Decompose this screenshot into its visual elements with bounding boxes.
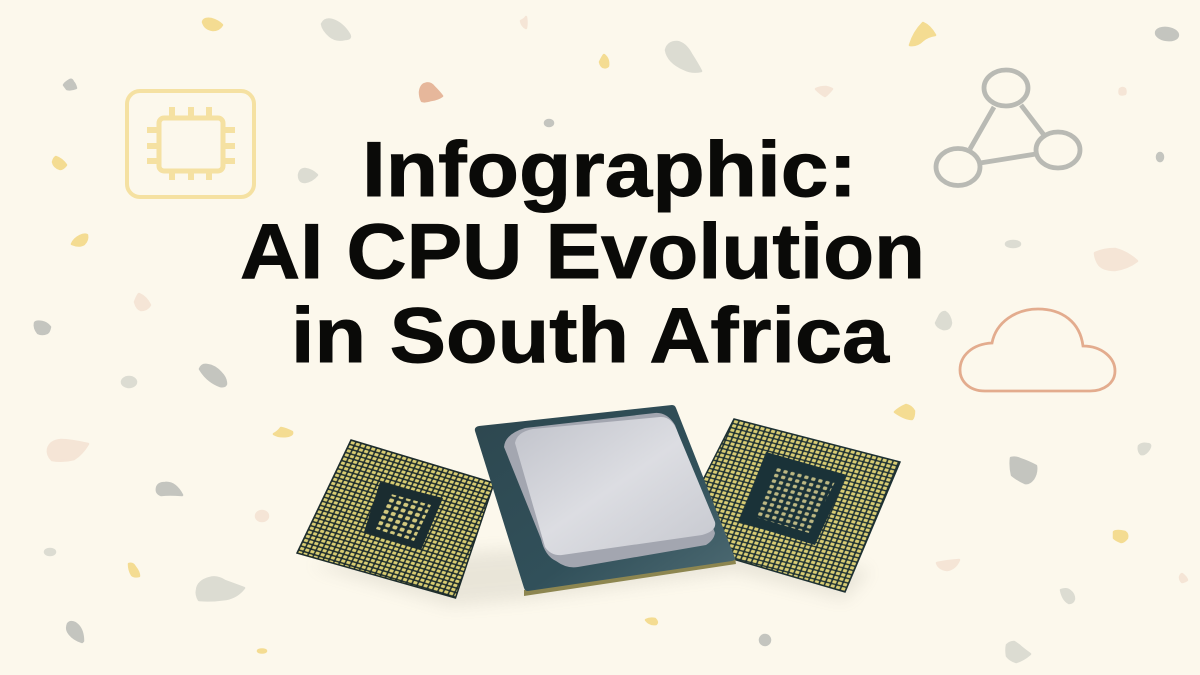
illustration: three processors xyxy=(297,405,900,606)
icon: processor chip outline xyxy=(127,91,254,197)
icon: cloud outline xyxy=(960,309,1115,391)
title: AI CPU Evolution xyxy=(240,207,925,295)
processor: right, underside pins xyxy=(672,419,900,592)
title xyxy=(240,125,925,379)
processor: centre, metal lid xyxy=(475,405,736,596)
icon: network of three nodes xyxy=(936,70,1080,186)
title: Infographic: xyxy=(362,125,857,213)
processor: left, underside pins xyxy=(297,440,494,598)
chip shadows xyxy=(310,545,870,606)
title: in South Africa xyxy=(291,291,890,379)
